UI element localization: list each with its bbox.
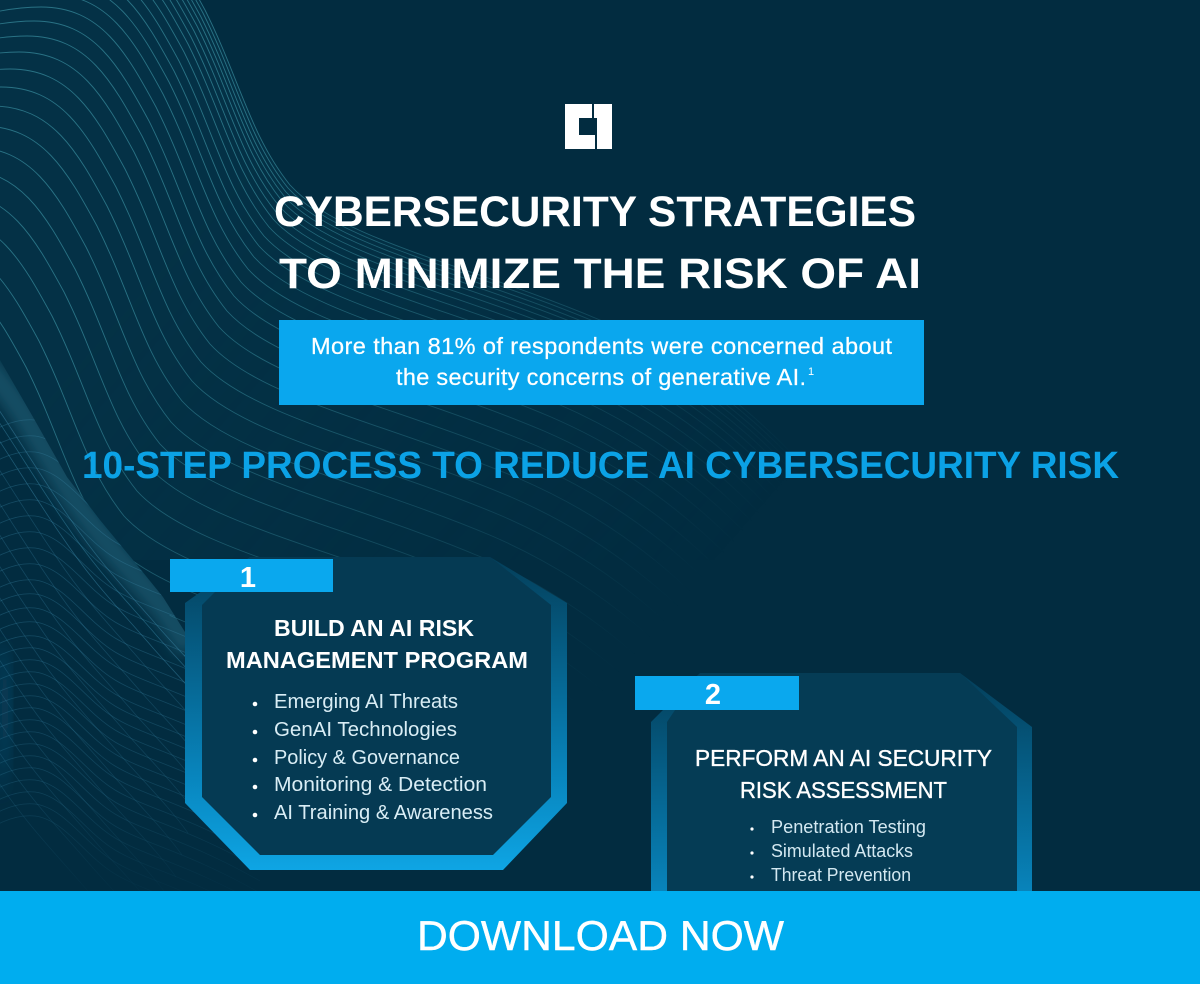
callout: statistic: 1: [808, 366, 814, 378]
step 1 number tab: 1: [240, 562, 256, 594]
callout: statistic: More than 81% of respondents were concerned about: [311, 333, 892, 359]
call to action: download now: [0, 891, 1200, 984]
step 1 list: [253, 691, 493, 824]
step 2 list: Threat Prevention: [771, 865, 911, 885]
panel 1 frame: [185, 557, 567, 870]
step 2 heading: [695, 745, 992, 803]
title: CYBERSECURITY STRATEGIES: [274, 188, 916, 236]
panel: step 2: [635, 673, 1032, 891]
panel 1 interior: [202, 557, 551, 855]
panel 2 interior: [667, 673, 1017, 891]
step 2 list: Simulated Attacks: [771, 841, 913, 861]
heading: 10-step process: 10-STEP PROCESS TO REDUCE AI CYBERSECURITY RISK: [82, 445, 1120, 487]
panel 2 frame: [651, 673, 1032, 891]
step 2 list: Penetration Testing: [771, 817, 926, 837]
title: TO MINIMIZE THE RISK OF AI: [279, 250, 921, 298]
step 1 heading: [226, 615, 528, 673]
call to action: download now: DOWNLOAD NOW: [417, 912, 784, 959]
step 1 number tab: [170, 559, 333, 594]
step 2 list: [750, 817, 926, 885]
step 2 heading: PERFORM AN AI SECURITY: [695, 745, 992, 771]
step 1 list: GenAI Technologies: [274, 719, 457, 741]
step 1 list: Policy & Governance: [274, 747, 460, 769]
wave lines: lower left: [0, 360, 236, 877]
step 2 heading: RISK ASSESSMENT: [740, 777, 947, 803]
callout: statistic: [279, 320, 924, 405]
step 1 heading: MANAGEMENT PROGRAM: [226, 647, 528, 673]
step 1 list: Monitoring & Detection: [274, 774, 487, 796]
wave lines: upper: [0, 0, 747, 656]
title: [274, 188, 921, 298]
step 2 number tab: 2: [705, 679, 721, 711]
step 1 heading: BUILD AN AI RISK: [274, 615, 474, 641]
callout: statistic: the security concerns of generative AI.: [396, 364, 806, 390]
panel: step 1: [170, 557, 567, 870]
icon: logo: [565, 104, 612, 149]
step 2 number tab: [635, 676, 799, 711]
step 1 list: AI Training & Awareness: [274, 802, 493, 824]
step 1 list: Emerging AI Threats: [274, 691, 458, 713]
